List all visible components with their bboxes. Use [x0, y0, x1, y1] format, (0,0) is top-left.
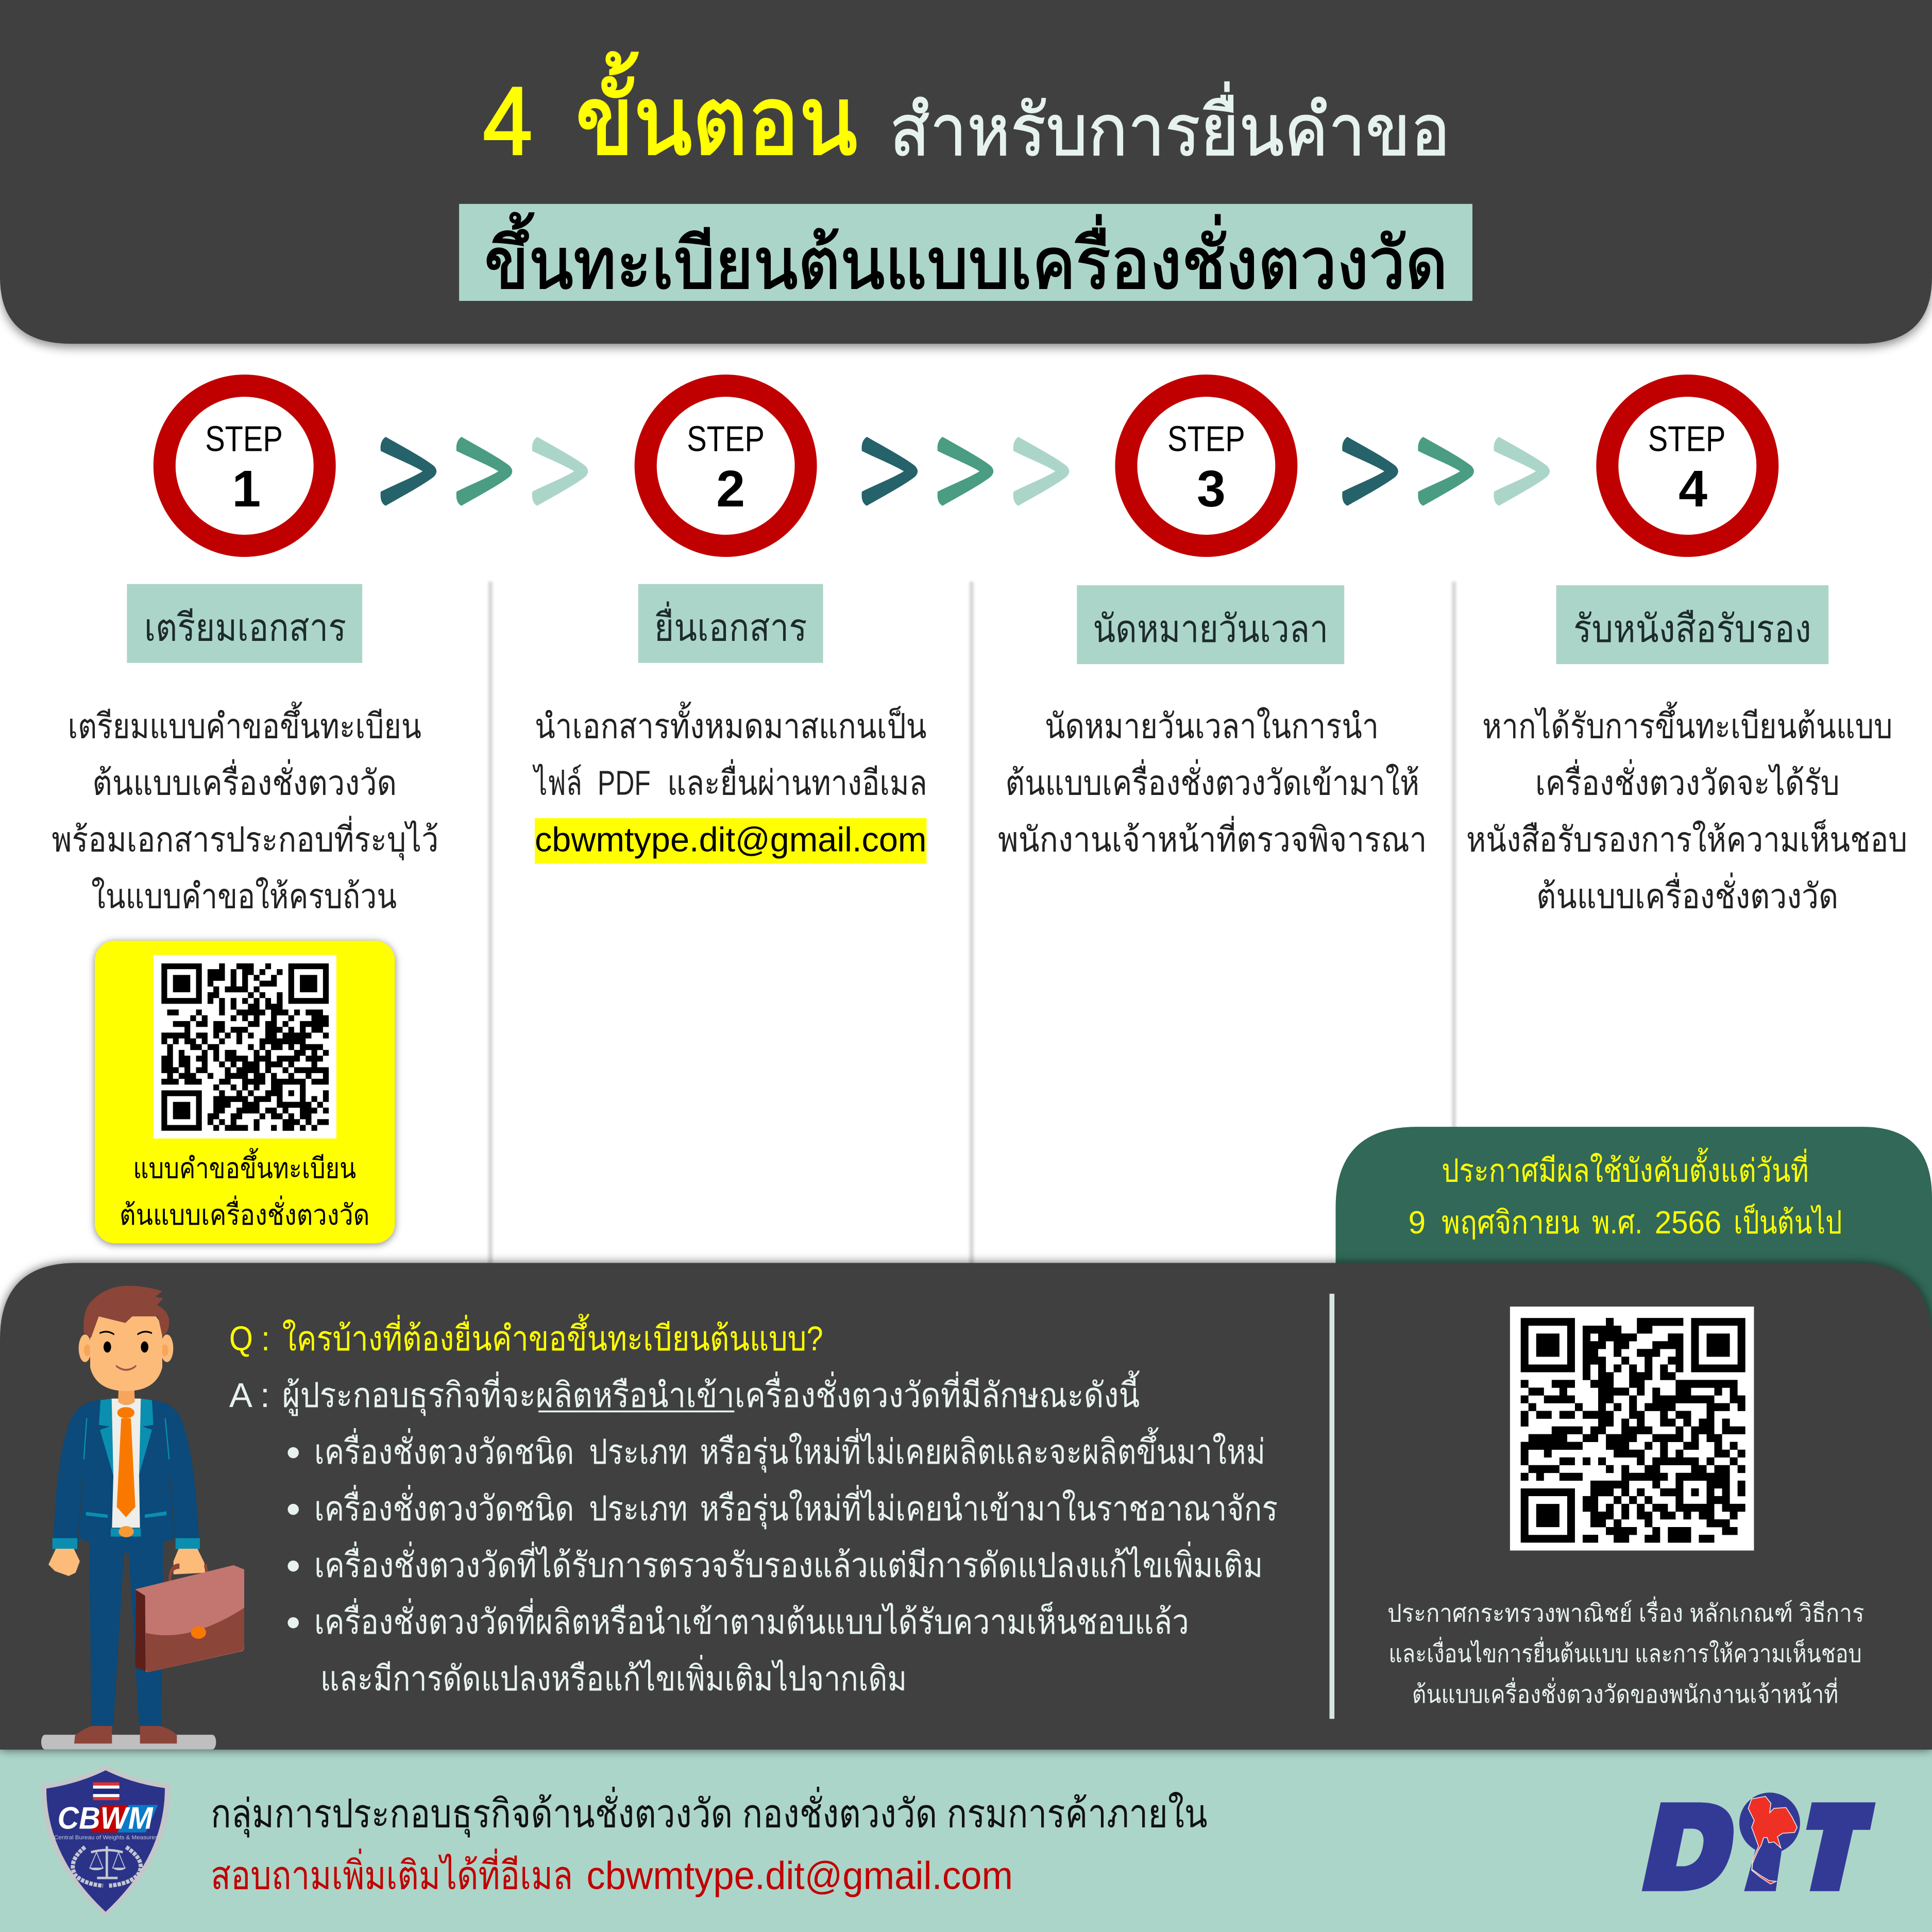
title: 4 steps: ขั้นตอน: [575, 52, 858, 175]
QR card caption: ต้นแบบเครื่องชั่งตวงวัด: [120, 1195, 369, 1231]
answer intro: A :: [229, 1376, 270, 1415]
footer department line: กลุ่มการประกอบธุรกิจด้านชั่งตวงวัด กองชั่งตวงวัด กรมการค้าภายใน: [211, 1787, 1208, 1838]
step 1 badge: STEP: [205, 418, 283, 459]
step 1 body text: ในแบบคำขอให้ครบถ้วน: [91, 877, 397, 916]
effective date notice: 9: [1409, 1205, 1426, 1241]
answer bullet list: ประเภท: [589, 1433, 688, 1471]
arrows: step 3 to 4: [1342, 437, 1550, 506]
effective date notice: 2566: [1655, 1205, 1721, 1241]
step 4 badge: [1607, 386, 1768, 546]
announcement caption: ต้นแบบเครื่องชั่งตวงวัดของพนักงานเจ้าหน้าที่: [1412, 1677, 1838, 1708]
QR code: announcement: [1510, 1307, 1754, 1551]
step 4 body text: ต้นแบบเครื่องชั่งตวงวัด: [1536, 873, 1838, 916]
step 1 body text: เตรียมแบบคำขอขึ้นทะเบียน: [68, 702, 421, 746]
step 3 body text: ต้นแบบเครื่องชั่งตวงวัดเข้ามาให้: [1006, 759, 1419, 803]
title: 4 steps: 4: [483, 67, 532, 175]
step 2 body text: PDF: [598, 764, 651, 803]
step 2 badge: 2: [716, 460, 745, 518]
QR card caption: แบบคำขอขึ้นทะเบียน: [133, 1148, 356, 1184]
step 1 badge: 1: [232, 460, 261, 518]
step 1 body text: [52, 702, 438, 916]
answer bullet list: เครื่องชั่งตวงวัดชนิด: [314, 1485, 574, 1528]
announcement caption: [1387, 1596, 1864, 1708]
effective date notice: เป็นต้นไป: [1734, 1204, 1842, 1241]
step 3 body text: [998, 707, 1427, 859]
yellow QR card: [95, 941, 395, 1243]
footer contact line: cbwmtype.dit@gmail.com: [586, 1854, 1013, 1897]
CBWM shield logo: [42, 1765, 171, 1916]
answer intro: ผู้ประกอบธุรกิจที่จะผลิตหรือนำเข้าเครื่องชั่งตวงวัดที่มีลักษณะดังนี้: [282, 1370, 1140, 1416]
step 2 heading: ยื่นเอกสาร: [654, 601, 807, 649]
arrows: step 1 to 2: [381, 437, 588, 506]
step 4 heading: [1556, 585, 1828, 664]
QR card caption: [120, 1148, 369, 1231]
effective date notice: ประกาศมีผลใช้บังคับตั้งแต่วันที่: [1442, 1148, 1809, 1189]
question: ใครบ้างที่ต้องยื่นคำขอขึ้นทะเบียนต้นแบบ?: [282, 1314, 823, 1358]
arrows: step 2 to 3: [862, 437, 1069, 506]
step 3 heading: นัดหมายวันเวลา: [1093, 607, 1328, 650]
businessman illustration: [41, 1286, 244, 1750]
title: for submitting the request: สำหรับการยื่นคำขอ: [890, 81, 1450, 171]
footer band: [0, 1743, 1932, 1932]
step 1 badge: [164, 386, 325, 546]
step 3 body text: นัดหมายวันเวลาในการนำ: [1045, 707, 1379, 746]
step 1 heading: [127, 584, 362, 663]
step 4 heading: รับหนังสือรับรอง: [1573, 607, 1811, 650]
step 3 heading: [1077, 585, 1344, 664]
step 3 body text: พนักงานเจ้าหน้าที่ตรวจพิจารณา: [998, 816, 1427, 859]
header panel: [0, 0, 1932, 344]
question: Q :: [229, 1319, 270, 1358]
answer bullet list: เครื่องชั่งตวงวัดที่ผลิตหรือนำเข้าตามต้นแบบได้รับความเห็นชอบแล้ว: [314, 1598, 1189, 1641]
announcement caption: ประกาศกระทรวงพาณิชย์ เรื่อง หลักเกณฑ์ วิธีการ: [1387, 1596, 1864, 1627]
CBWM shield logo: CBWM: [58, 1801, 154, 1835]
answer bullet list: เครื่องชั่งตวงวัดที่ได้รับการตรวจรับรองแล้วแต่มีการดัดแปลงแก้ไขเพิ่มเติม: [314, 1541, 1263, 1585]
effective date notice: พ.ศ.: [1592, 1205, 1642, 1241]
step 1 body text: พร้อมเอกสารประกอบที่ระบุไว้: [52, 816, 438, 861]
step 4 badge: 4: [1679, 460, 1707, 518]
step 2 body text: cbwmtype.dit@gmail.com: [535, 821, 926, 859]
answer bullet list: [287, 1427, 1278, 1698]
announcement caption: และเงื่อนไขการยื่นต้นแบบ และการให้ความเห็นชอบ: [1388, 1637, 1862, 1668]
footer contact line: สอบถามเพิ่มเติมได้ที่อีเมล: [211, 1848, 573, 1897]
CBWM shield logo: Central Bureau of Weights & Measures: [54, 1835, 158, 1841]
step 2 body text: ไฟล์: [532, 764, 582, 803]
step 2 body text: และยื่นผ่านทางอีเมล: [667, 759, 927, 803]
step 2 badge: [646, 386, 806, 546]
step 3 badge: 3: [1197, 460, 1226, 518]
step 3 badge: STEP: [1167, 418, 1245, 459]
Q and A panel: [0, 1263, 1932, 1750]
DIT logo: [1642, 1792, 1876, 1891]
subtitle band: ขึ้นทะเบียนต้นแบบเครื่องชั่งตวงวัด: [484, 213, 1448, 304]
effective date notice: [1335, 1127, 1932, 1355]
footer contact line: [211, 1848, 1013, 1897]
step 4 body text: [1466, 702, 1907, 916]
step 2 badge: STEP: [687, 418, 765, 459]
step 4 body text: เครื่องชั่งตวงวัดจะได้รับ: [1535, 759, 1840, 803]
step 2 body text: [532, 702, 927, 863]
step 1 heading: เตรียมเอกสาร: [144, 606, 346, 649]
step 1 body text: ต้นแบบเครื่องชั่งตวงวัด: [92, 759, 397, 803]
step 2 heading: [638, 584, 823, 663]
effective date notice: พฤศจิกายน: [1442, 1205, 1580, 1241]
QR code: request form: [161, 963, 329, 1131]
step 2 body text: นำเอกสารทั้งหมดมาสแกนเป็น: [535, 702, 926, 746]
answer bullet list: หรือรุ่นใหม่ที่ไม่เคยผลิตและจะผลิตขึ้นมาใหม่: [700, 1427, 1265, 1473]
step 4 badge: STEP: [1648, 418, 1725, 459]
answer bullet list: ประเภท: [589, 1489, 688, 1528]
title: 4 steps: [483, 52, 858, 175]
answer bullet list: และมีการดัดแปลงหรือแก้ไขเพิ่มเติมไปจากเดิม: [320, 1655, 907, 1698]
answer bullet list: เครื่องชั่งตวงวัดชนิด: [314, 1428, 574, 1471]
answer bullet list: หรือรุ่นใหม่ที่ไม่เคยนำเข้ามาในราชอาณาจักร: [700, 1485, 1278, 1530]
step 3 badge: [1126, 386, 1286, 546]
